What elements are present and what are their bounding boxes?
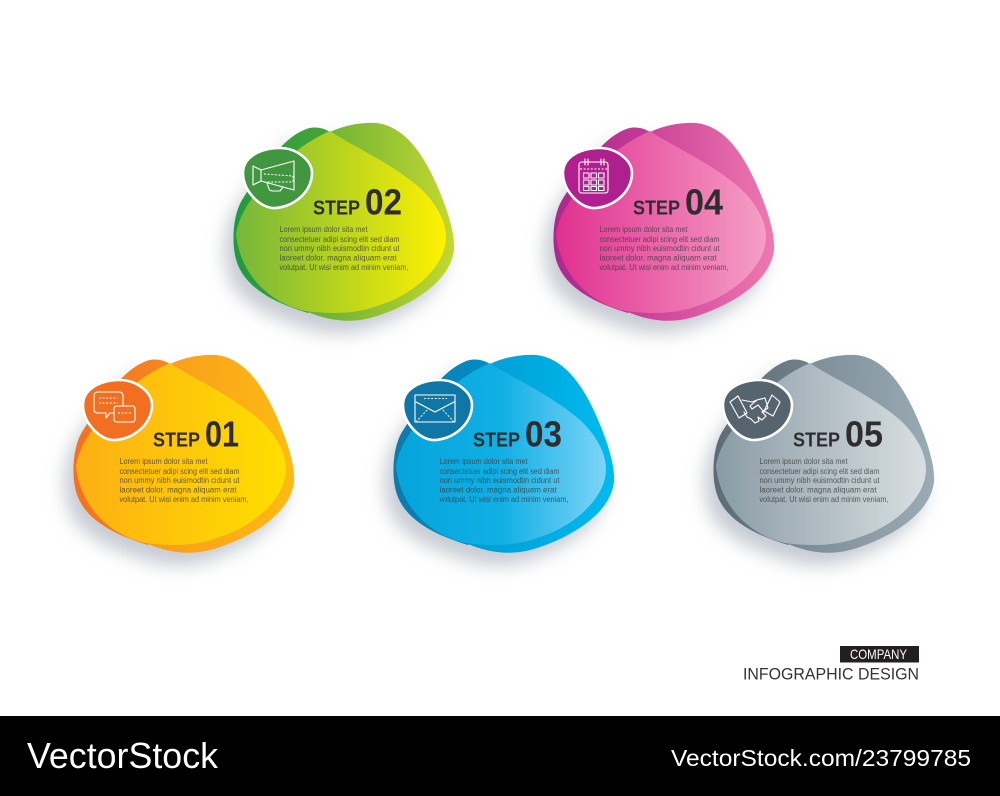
footer bar: VectorStock.com/23799785 <box>671 745 971 771</box>
text block: step 03 description: Lorem ipsum dolor sita met <box>440 457 528 466</box>
text block: step 01 description: laoreet dolor. magna aliquam erat <box>120 486 237 494</box>
heading: step 02 <box>313 182 402 222</box>
icon badge: handshake <box>723 380 792 440</box>
panel: step 04 <box>544 123 774 334</box>
text block: step 04 description: non ummy nibh euismodtin cidunt ut <box>600 244 720 253</box>
text block: step 01 description: Lorem ipsum dolor sita met <box>120 457 208 466</box>
text block: step 02 description: non ummy nibh euismodtin cidunt ut <box>280 244 400 253</box>
heading: step 03: STEP <box>473 428 520 452</box>
company label: COMPANY <box>850 646 908 662</box>
icon badge: calendar <box>563 148 632 208</box>
icon badge: megaphone <box>243 148 312 208</box>
text block: step 03 description: volutpat. Ut wisi enim ad minim veniam, <box>440 495 568 504</box>
text block: step 05 description: volutpat. Ut wisi enim ad minim veniam, <box>760 495 888 504</box>
text block: step 03 description: non ummy nibh euismodtin cidunt ut <box>440 476 560 485</box>
text block: step 02 description: laoreet dolor. magna aliquam erat <box>280 254 397 262</box>
heading: step 05 <box>793 414 883 454</box>
heading: step 05: STEP <box>793 428 840 452</box>
panel: step 01 <box>64 355 294 566</box>
text block: step 01 description: consectetuer adipi scing elit sed diam <box>120 467 240 476</box>
heading: step 04: 04 <box>685 182 723 222</box>
panel: step 03 <box>384 355 614 566</box>
icon badge: chat bubbles <box>83 380 152 440</box>
footer bar: VectorStock <box>27 735 219 776</box>
text block: step 05 description: Lorem ipsum dolor sita met <box>760 457 848 466</box>
heading: step 01 <box>153 414 239 454</box>
text block: step 03 description: consectetuer adipi scing elit sed diam <box>440 467 560 476</box>
text block: step 05 description: laoreet dolor. magna aliquam erat <box>760 486 877 494</box>
heading: step 05: 05 <box>845 414 883 454</box>
footer bar <box>0 716 1000 796</box>
text block: step 02 description: consectetuer adipi scing elit sed diam <box>280 235 400 244</box>
text block: step 05 description <box>760 457 888 504</box>
text block: step 02 description: Lorem ipsum dolor sita met <box>280 225 368 234</box>
panel: step 05 <box>704 355 934 566</box>
text block: step 03 description: laoreet dolor. magna aliquam erat <box>440 486 557 494</box>
text block: step 03 description <box>440 457 568 504</box>
text block: step 01 description: non ummy nibh euismodtin cidunt ut <box>120 476 240 485</box>
text block: step 04 description: laoreet dolor. magna aliquam erat <box>600 254 717 262</box>
text block: step 02 description: volutpat. Ut wisi enim ad minim veniam, <box>280 263 408 272</box>
heading: step 04 <box>633 182 723 222</box>
subtitle: infographic design: INFOGRAPHIC DESIGN <box>743 666 919 684</box>
text block: step 04 description: Lorem ipsum dolor sita met <box>600 225 688 234</box>
text block: step 04 description: volutpat. Ut wisi enim ad minim veniam, <box>600 263 728 272</box>
heading: step 02: STEP <box>313 196 360 220</box>
heading: step 01: 01 <box>205 414 239 454</box>
heading: step 03 <box>473 414 562 454</box>
heading: step 02: 02 <box>365 182 402 222</box>
text block: step 04 description <box>600 225 728 272</box>
heading: step 03: 03 <box>525 414 562 454</box>
panel: step 02 <box>224 123 454 334</box>
text block: step 01 description: volutpat. Ut wisi enim ad minim veniam, <box>120 495 248 504</box>
heading: step 01: STEP <box>153 428 200 452</box>
text block: step 01 description <box>120 457 248 504</box>
heading: step 04: STEP <box>633 196 680 220</box>
text block: step 04 description: consectetuer adipi scing elit sed diam <box>600 235 720 244</box>
icon badge: envelope <box>403 380 472 440</box>
text block: step 05 description: non ummy nibh euismodtin cidunt ut <box>760 476 880 485</box>
text block: step 02 description <box>280 225 408 272</box>
text block: step 05 description: consectetuer adipi scing elit sed diam <box>760 467 880 476</box>
